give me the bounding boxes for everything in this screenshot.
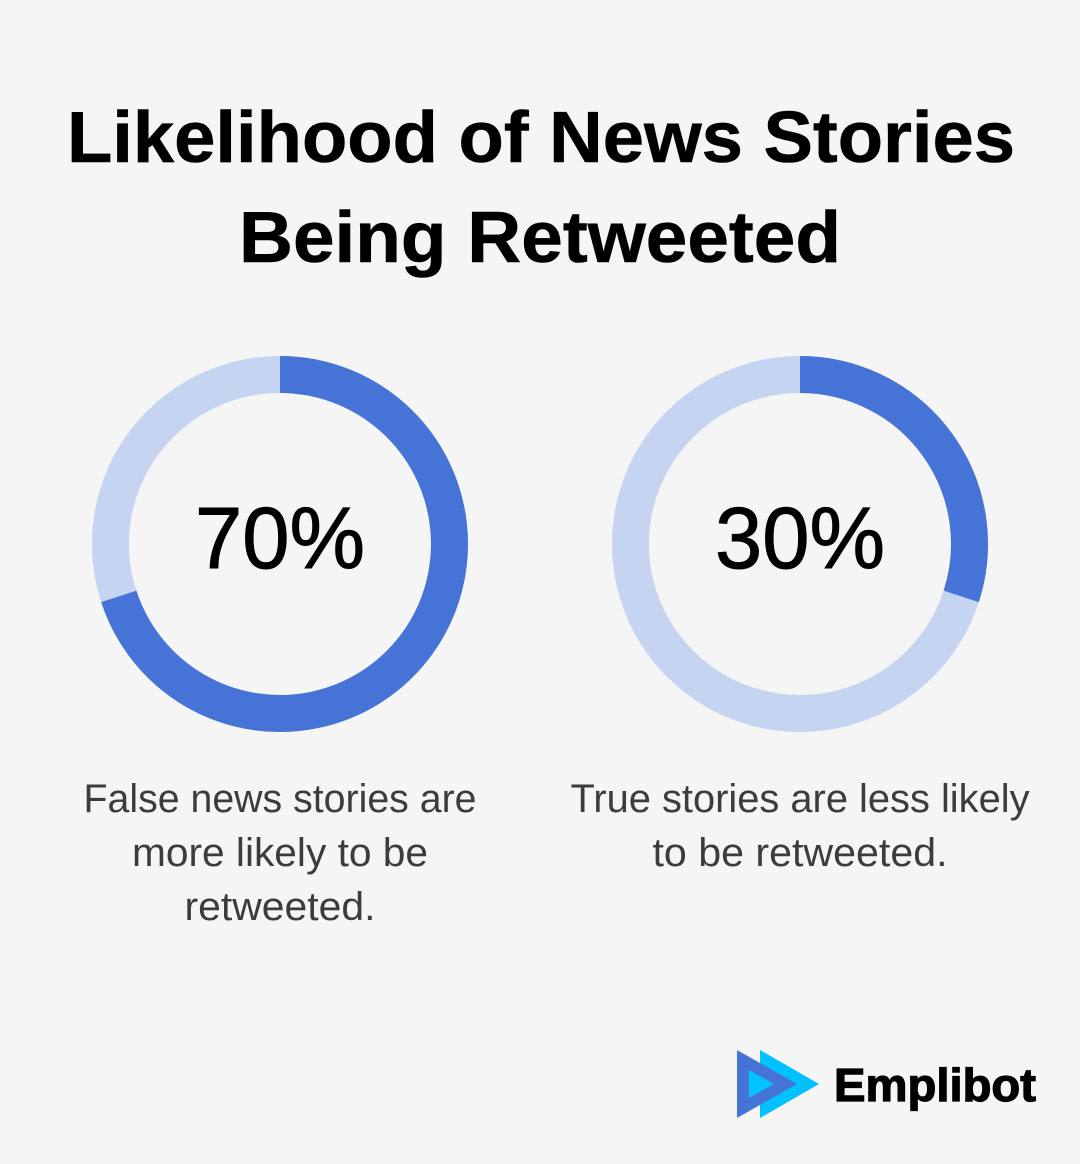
value: 30%: 30%	[715, 490, 885, 587]
caption: false news: retweeted.	[184, 885, 376, 929]
title: Likelihood of News Stories	[67, 98, 1015, 178]
caption: false news	[84, 777, 476, 929]
title: Being Retweeted	[239, 198, 841, 278]
logo: Emplibot	[737, 1050, 1036, 1118]
title	[67, 98, 1015, 278]
caption: true news	[570, 777, 1030, 875]
donut chart: true news 30%	[630, 374, 970, 714]
value: 70%: 70%	[195, 490, 365, 587]
caption: true news: True stories are less likely	[570, 777, 1030, 821]
caption: false news: False news stories are	[84, 777, 476, 821]
icon: play triangles	[737, 1050, 819, 1118]
wordmark: Emplibot	[834, 1059, 1036, 1111]
donut chart: false news 70%	[110, 374, 450, 714]
caption: false news: more likely to be	[132, 831, 428, 875]
caption: true news: to be retweeted.	[652, 831, 948, 875]
